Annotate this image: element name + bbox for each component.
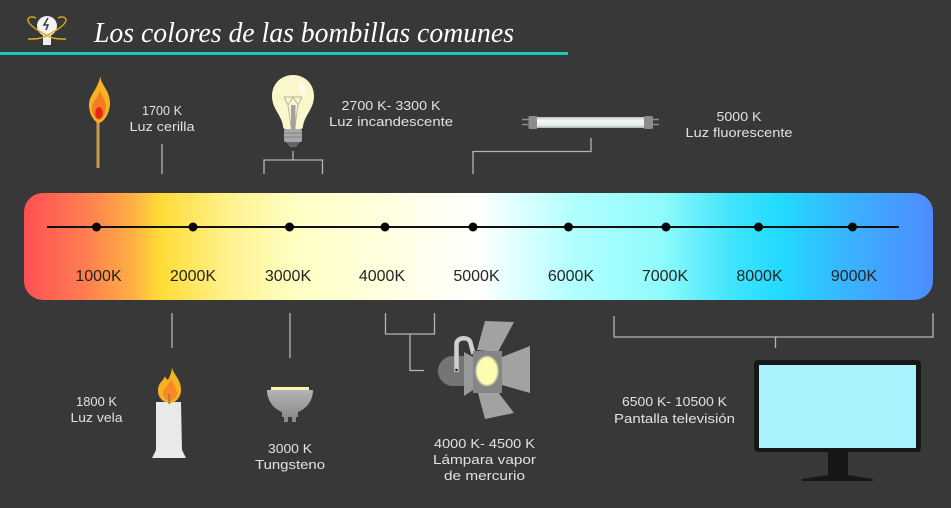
- connector: cerilla: [161, 144, 163, 174]
- label: tungsteno: Tungsteno: [255, 457, 325, 472]
- label: television: Pantalla televisión: [614, 411, 735, 426]
- label: luz incandescente: [329, 98, 453, 129]
- temperature labels: 6000K: [548, 268, 594, 285]
- connector: mercurio: [386, 313, 434, 370]
- temperature labels: 7000K: [642, 268, 688, 285]
- label: luz cerilla: [130, 103, 195, 134]
- gradient band: [24, 193, 933, 300]
- label: mercurio: Lámpara vapor: [433, 452, 537, 467]
- label: television: [614, 394, 735, 426]
- icon: candle: [152, 366, 186, 458]
- label: tungsteno: [255, 441, 325, 472]
- temperature labels: [75, 268, 877, 285]
- label: luz vela: Luz vela: [70, 410, 123, 425]
- icon: incandescent bulb: [272, 75, 314, 147]
- label: luz fluorescente: Luz fluorescente: [686, 125, 792, 140]
- temperature labels: 4000K: [359, 268, 405, 285]
- label: luz incandescente: Luz incandescente: [329, 114, 453, 129]
- label: mercurio: de mercurio: [444, 468, 525, 483]
- label: television: 6500 K- 10500 K: [622, 394, 727, 409]
- label: luz incandescente: 2700 K- 3300 K: [342, 98, 441, 113]
- connector: fluorescente: [473, 138, 591, 174]
- temperature labels: 2000K: [170, 268, 216, 285]
- label: mercurio: [433, 436, 537, 483]
- label: tungsteno: 3000 K: [268, 441, 312, 456]
- temperature labels: 5000K: [453, 268, 500, 285]
- temperature labels: 8000K: [736, 268, 783, 285]
- panel: color temperature spectrum: [24, 193, 933, 300]
- connector: tungsteno: [289, 313, 291, 358]
- icon: logo bulb: [28, 16, 66, 45]
- label: luz fluorescente: [686, 109, 792, 140]
- label: luz cerilla: Luz cerilla: [130, 119, 195, 134]
- icon: match: [89, 76, 110, 168]
- label: luz vela: [70, 394, 123, 425]
- connector: incandescente: [264, 151, 322, 174]
- temperature labels: 9000K: [831, 268, 877, 285]
- connector: vela: [171, 313, 173, 348]
- label: luz fluorescente: 5000 K: [716, 109, 762, 124]
- label: luz vela: 1800 K: [76, 394, 117, 409]
- label: luz cerilla: 1700 K: [142, 103, 182, 118]
- title: Los colores de las bombillas comunes: [93, 18, 514, 49]
- icon: television: [754, 360, 921, 481]
- timeline axis: [47, 222, 899, 232]
- temperature labels: 3000K: [265, 268, 311, 285]
- connector: television: [614, 313, 933, 348]
- temperature labels: 1000K: [75, 268, 122, 285]
- title underline: [0, 52, 568, 55]
- icon: spotlight: [438, 321, 530, 419]
- icon: tungsten lamp: [267, 387, 313, 422]
- label: mercurio: 4000 K- 4500 K: [434, 436, 535, 451]
- icon: fluorescent tube: [522, 116, 659, 129]
